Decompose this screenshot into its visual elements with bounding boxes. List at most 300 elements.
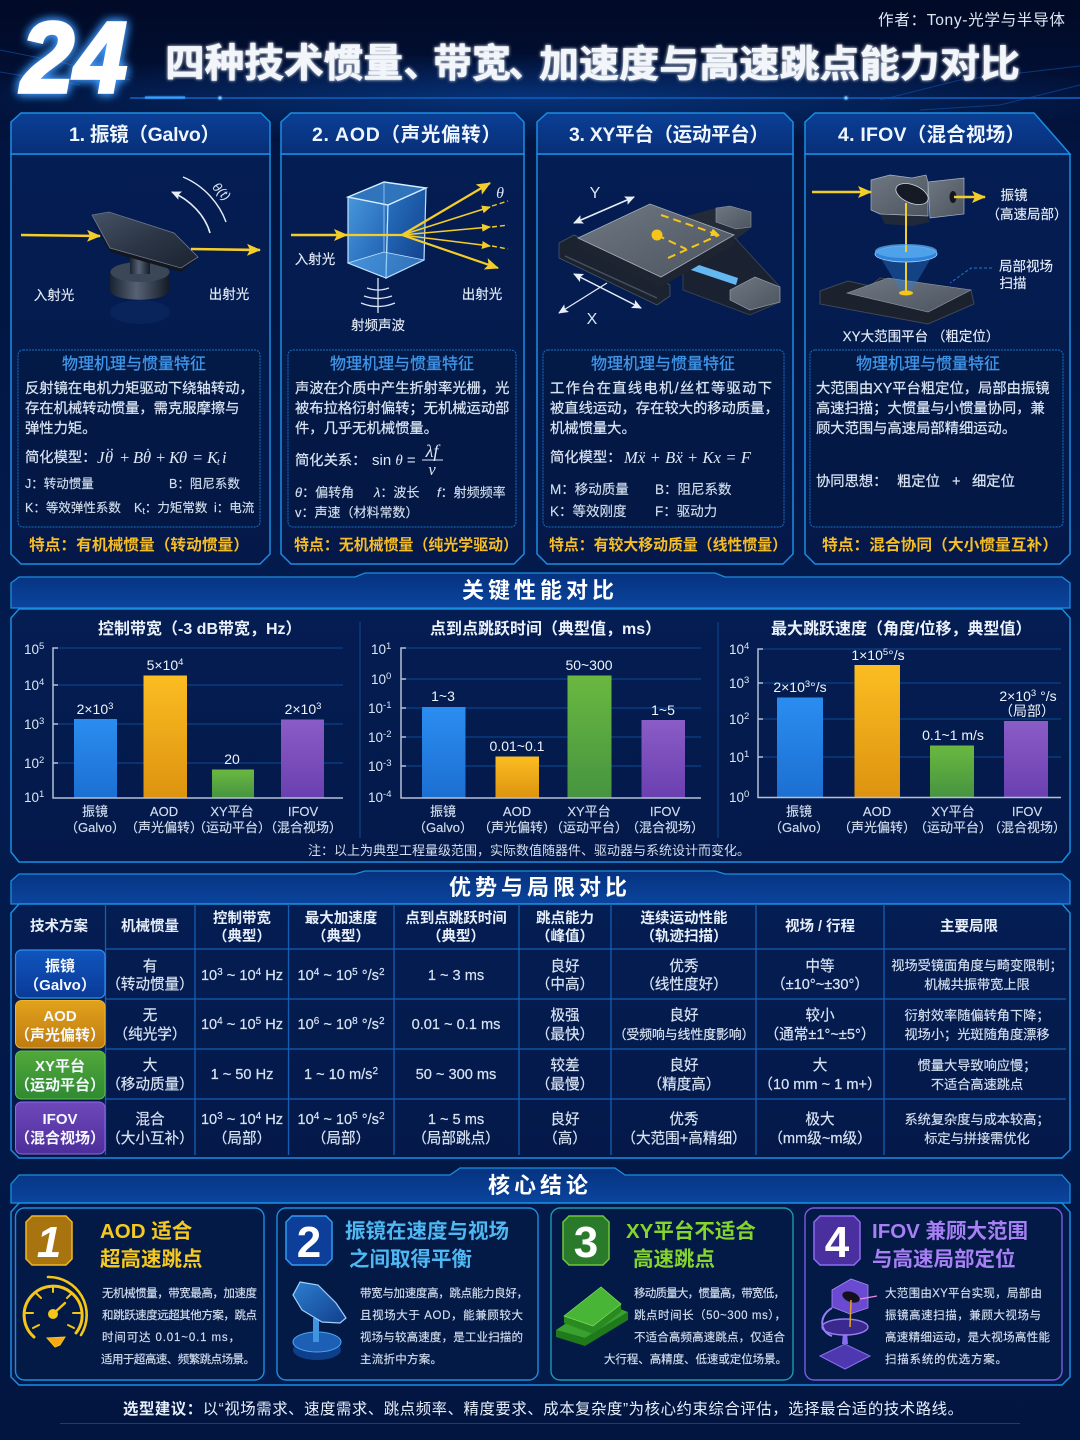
row: galvo: ~ 10 [223, 968, 256, 984]
table header [30, 909, 998, 945]
row: IFOV: 4 [314, 1111, 320, 1122]
box: mechanism: λ：波长 [373, 485, 419, 500]
conclusion 2: 带宽与加速度高，跳点能力良好， [360, 1286, 528, 1300]
chart: bandwidth: 控制带宽（-3 dB带宽，Hz） [98, 619, 302, 638]
heading: 3. XY平台（运动平台） [569, 123, 769, 146]
chart: bandwidth: XY平台 [210, 804, 254, 819]
chart: jump time: 振镜 [430, 804, 456, 819]
formula: K [168, 448, 181, 467]
row: AOD: 0.01 ~ 0.1 ms [412, 1017, 500, 1033]
row: AOD: 较小 [805, 1006, 835, 1024]
chart: jump speed: °/s [810, 679, 827, 695]
box: mechanism: 物理机理与惯量特征 [330, 355, 474, 373]
chart: bandwidth: 2×10 [77, 701, 108, 717]
box: mechanism: 物理机理与惯量特征 [591, 355, 735, 373]
label: scan: 扫描 [1000, 276, 1026, 291]
conclusion 4: 大范围由XY平台实现，局部由 [885, 1286, 1042, 1300]
row: IFOV: 2 [379, 1111, 385, 1122]
row: galvo: （中高） [536, 976, 594, 993]
row: XY: 1 ~ 50 Hz [211, 1067, 273, 1083]
box: mechanism: 物理机理与惯量特征 [62, 355, 206, 373]
row: galvo: 良好 [550, 958, 580, 975]
chart: jump time: 10 [368, 730, 383, 745]
formula: J [97, 448, 105, 467]
chart: bandwidth: 1 [39, 789, 44, 800]
box: mechanism: v [428, 460, 436, 479]
row: IFOV: 系统复杂度与成本较高； [904, 1111, 1050, 1128]
chart: jump time: 1~5 [651, 702, 675, 718]
chart: jump time: 10 [368, 701, 383, 716]
row: galvo: 2 [379, 967, 385, 978]
chart: bandwidth: （运动平台） [193, 820, 271, 835]
row: AOD: （纯光学） [114, 1026, 186, 1043]
row: XY: 良好 [669, 1057, 699, 1074]
badge 2 [286, 1216, 332, 1267]
chart: jump speed: 10 [729, 790, 744, 805]
chart: jump speed: 4 [744, 641, 749, 652]
row: IFOV: （mm级~m级） [768, 1130, 872, 1147]
box: mechanism: Mẍ + Bẍ + Kx = F [623, 448, 752, 467]
formula: + [119, 448, 130, 467]
row: AOD: （声光偏转） [15, 1026, 105, 1044]
row: galvo: （Galvo） [24, 977, 96, 994]
chart: bandwidth: （混合视场） [264, 820, 342, 835]
chart: jump time: 1~3 [431, 688, 455, 704]
chart: bandwidth: 10 [24, 678, 39, 693]
row: IFOV: 标定与拼接需优化 [924, 1130, 1030, 1146]
chart: jump time: （声光偏转） [478, 820, 556, 835]
row: IFOV: 1 ~ 5 ms [428, 1112, 484, 1128]
row: AOD: 6 [314, 1016, 320, 1027]
row: AOD: 5 [256, 1016, 262, 1027]
row: AOD: 良好 [669, 1007, 699, 1024]
table header: （轨迹扫描） [640, 927, 728, 945]
conclusion 2: 主流折中方案。 [360, 1352, 442, 1366]
chart: jump time: XY平台 [567, 804, 611, 819]
conclusion 3: 不适合高频高速跳点，仅适合 [634, 1330, 786, 1344]
icon: AOD crystal: θ [496, 185, 504, 202]
icon: XY stage: Y [590, 185, 601, 202]
row: galvo: 优秀 [669, 958, 699, 975]
chart: jump time: 10 [368, 759, 383, 774]
row: IFOV: 10 [297, 1112, 314, 1128]
conclusion 4: 振镜高速扫描，兼顾大视场与 [885, 1308, 1041, 1322]
chart: jump time: （运动平台） [550, 820, 628, 835]
feature: 特点：有较大移动质量（线性惯量） [549, 535, 787, 554]
chart: jump time: 0 [386, 671, 391, 682]
box: mechanism: 物理机理与惯量特征 [856, 355, 1000, 373]
icon: gauge [24, 1277, 87, 1347]
row: IFOV: 良好 [550, 1111, 580, 1128]
chart: bandwidth: 5×10 [147, 657, 178, 673]
icon: mirror [293, 1282, 346, 1360]
chart: jump speed: °/s [1036, 688, 1057, 704]
title: 加速度与高速跳点能力对比 [539, 43, 1020, 85]
box: mechanism: M：移动质量 [550, 482, 629, 497]
row: IFOV [15, 1102, 1050, 1154]
conclusion 4 [805, 1208, 1062, 1380]
author: 作者：Tony-光学与半导体 [878, 11, 1065, 29]
headline: XY平台不适合 [626, 1219, 756, 1243]
row: galvo: 10 [297, 968, 314, 984]
table header: （峰值） [536, 927, 594, 945]
title: 四种技术惯量 [165, 42, 403, 86]
chart: bandwidth: （Galvo） [65, 820, 125, 835]
chart: jump speed: 1×10 [851, 647, 883, 663]
chart: jump speed: （Galvo） [769, 820, 829, 835]
chart: jump time: -2 [383, 729, 391, 740]
icon: galvo mirror: θ(t) [210, 179, 234, 203]
label: outgoing: 出射光 [209, 287, 249, 302]
table header: 最大加速度 [305, 909, 378, 927]
row: AOD: 极强 [550, 1007, 580, 1024]
icon: IFOV system [812, 175, 992, 324]
row: XY: 大 [143, 1057, 157, 1074]
heading: 优势与局限对比 [449, 875, 631, 900]
heading: 4. IFOV（混合视场） [838, 124, 1025, 146]
row: IFOV: （局部跳点） [412, 1130, 500, 1147]
chart: jump speed: 2×10 [773, 679, 805, 695]
table header: 连续运动性能 [640, 909, 728, 927]
conclusion 2: 且视场大于 AOD，能兼顾较大 [360, 1308, 524, 1322]
table header: （典型） [427, 927, 485, 945]
chart: jump speed: 2 [744, 711, 749, 722]
headline: 振镜在速度与视场 [345, 1219, 509, 1243]
chart: bandwidth: 20 [224, 751, 240, 767]
chart: jump time: （Galvo） [413, 820, 473, 835]
chart: bandwidth: 2×10 [285, 701, 316, 717]
table header: 跳点能力 [536, 909, 594, 927]
chart: jump speed: 3 [1031, 688, 1036, 699]
chart: jump time [368, 619, 704, 835]
chart: jump time: 点到点跳跃时间（典型值，ms） [430, 619, 661, 638]
table header: 视场 / 行程 [785, 918, 856, 935]
badge 4: 4 [825, 1218, 850, 1267]
label: incoming: 入射光 [34, 288, 74, 303]
chart: jump speed [729, 619, 1066, 835]
row: galvo: 5 [352, 967, 358, 978]
conclusion 1 [16, 1208, 264, 1380]
row: IFOV: （局部） [312, 1130, 370, 1147]
box: mechanism: F：驱动力 [655, 504, 717, 519]
row: IFOV: 3 [217, 1111, 223, 1122]
formula: B [133, 448, 143, 467]
box: mechanism: t [142, 506, 145, 516]
label: incoming: 入射光 [295, 252, 335, 267]
conclusion 4: 与高速局部定位 [872, 1247, 1016, 1271]
row: AOD: 10 [201, 1017, 217, 1033]
note: 注：以上为典型工程量级范围，实际数值随器件、驱动器与系统设计而变化。 [308, 843, 750, 858]
chart: jump speed: 3 [805, 679, 810, 690]
panel: AOD [281, 113, 524, 564]
chart: jump speed: 2×10 [999, 688, 1031, 704]
row: IFOV: IFOV [42, 1111, 78, 1128]
badge 3: 3 [574, 1218, 598, 1267]
box: mechanism [288, 350, 516, 527]
table header: 机械惯量 [121, 918, 179, 935]
chart: bandwidth: 3 [108, 701, 113, 712]
chart: jump time: -4 [383, 789, 391, 800]
chart: jump time: 10 [371, 642, 386, 657]
badge 1: 1 [37, 1218, 61, 1267]
chart: bandwidth: 3 [316, 701, 321, 712]
box: mechanism: λf [425, 441, 441, 461]
chart: jump time: -1 [383, 700, 391, 711]
row: IFOV: （混合视场） [15, 1129, 105, 1147]
row: IFOV: ~ 10 [223, 1112, 256, 1128]
chart: jump speed: 0.1~1 m/s [922, 727, 984, 743]
row: XY: 大 [813, 1057, 827, 1074]
conclusion 1: 时间可达 0.01~0.1 ms， [102, 1330, 240, 1344]
chart: jump speed: 3 [744, 675, 749, 686]
row: IFOV: 10 [201, 1112, 217, 1128]
box: mechanism: 被直线运动，存在较大的移动质量， [550, 399, 779, 417]
icon: AOD crystal [291, 182, 508, 313]
row: galvo: 10 [201, 968, 217, 984]
chart: jump speed: 0 [744, 789, 749, 800]
row: AOD: ~ 10 [223, 1017, 256, 1033]
icon: purple system [820, 1279, 877, 1369]
chart: jump speed: °/s [888, 647, 905, 663]
formula: θ [143, 448, 151, 467]
panel: XY [537, 113, 793, 564]
formula [97, 448, 227, 468]
chart: bandwidth: 2 [39, 755, 44, 766]
chart: jump speed: 5 [883, 647, 888, 658]
badge 3 [563, 1216, 609, 1267]
chart: jump time: 10 [368, 790, 383, 805]
row: XY: （10 mm ~ 1 m+） [758, 1076, 882, 1093]
badge 4 [814, 1216, 860, 1267]
box: mechanism: J：转动惯量 [25, 476, 94, 491]
row: AOD: 无 [143, 1008, 157, 1024]
formula: θ [179, 448, 187, 467]
conclusion 1: 超高速跳点 [100, 1247, 202, 1271]
heading: 核心结论 [488, 1173, 592, 1198]
box: mechanism: 简化模型： [550, 449, 621, 466]
label: high speed local: （高速局部） [986, 206, 1068, 222]
icon: galvo mirror [21, 177, 260, 324]
chart: jump time: -3 [383, 758, 391, 769]
conclusion 4: 扫描系统的优选方案。 [885, 1352, 1007, 1366]
row: XY: 2 [372, 1066, 378, 1077]
row: AOD: 衍射效率随偏转角下降； [904, 1007, 1050, 1024]
box: mechanism: f：射频频率 [437, 485, 506, 500]
conclusion 3: 高速跳点 [633, 1247, 715, 1271]
row: galvo: 有 [143, 958, 157, 975]
formula: t [217, 457, 220, 468]
row: AOD: ~ 10 [319, 1017, 352, 1033]
row: AOD [15, 1000, 1050, 1048]
formula: θ [105, 448, 113, 467]
box: mechanism: 弹性力矩。 [25, 420, 96, 437]
chart: bandwidth: 5 [39, 641, 44, 652]
formula: i [222, 448, 227, 467]
chart: bandwidth: 10 [24, 717, 39, 732]
chart: jump speed: （运动平台） [914, 820, 992, 835]
conclusion 3: 移动质量大，惯量高，带宽低， [634, 1286, 785, 1300]
page number: 24 [19, 2, 127, 114]
row: galvo: （线性度好） [640, 976, 728, 993]
conclusion 2: 视场与较高速度，是工业扫描的 [360, 1330, 523, 1344]
chart: bandwidth: IFOV [288, 804, 318, 819]
chart: jump speed: 10 [729, 712, 744, 727]
box: mechanism: 简化关系： [295, 452, 366, 469]
chart: bandwidth: AOD [150, 804, 178, 819]
label: galvo: 振镜 [1000, 188, 1028, 203]
formula: + [155, 448, 166, 467]
conclusion 2: 之间取得平衡 [349, 1247, 472, 1271]
chart: jump time: 50~300 [565, 657, 613, 673]
conclusion 3: 大行程、高精度、低速或定位场景。 [604, 1352, 787, 1366]
chart: jump speed: （局部） [999, 703, 1055, 719]
formula: = [192, 448, 203, 467]
row: XY: （移动质量） [106, 1076, 194, 1093]
recommendation: 选型建议：以“视场需求、速度需求、跳点频率、精度要求、成本复杂度”为核心约束综合评估，选择最合适的技术路线。 [123, 1400, 963, 1418]
chart: jump time: AOD [503, 804, 531, 819]
chart: bandwidth: 振镜 [82, 804, 108, 819]
row: AOD: 视场小；光斑随角度漂移 [904, 1027, 1050, 1043]
conclusion 2 [277, 1208, 538, 1380]
box: mechanism: 细定位 [972, 473, 1015, 490]
section: comparison table [11, 871, 1070, 1158]
table header: （典型） [312, 927, 370, 945]
panel: IFOV [805, 113, 1070, 564]
row: AOD: Hz [261, 1017, 283, 1033]
row: galvo: 视场受镜面角度与畸变限制； [891, 958, 1063, 974]
box: mechanism [810, 350, 1063, 527]
row: AOD: （最快） [536, 1026, 594, 1043]
row: galvo: 中等 [805, 957, 835, 975]
row: galvo: （±10°~±30°） [771, 976, 869, 993]
box: mechanism: 简化模型： [25, 449, 96, 466]
conclusion 1: 适用于超高速、频繁跳点场景。 [101, 1352, 255, 1366]
chart: bandwidth: 3 [39, 716, 44, 727]
row: galvo: 振镜 [45, 957, 75, 975]
conclusion 1: 无机械惯量，带宽最高，加速度 [102, 1286, 258, 1300]
label: XY range: XY大范围平台 （粗定位） [843, 329, 999, 344]
row: XY: 1 ~ 10 m/s [304, 1067, 372, 1083]
row: galvo: 3 [217, 967, 223, 978]
box: mechanism: sin θ = [372, 452, 416, 469]
row: IFOV: Hz [261, 1112, 283, 1128]
section: conclusions [11, 1168, 1070, 1385]
chart: jump speed: 10 [729, 642, 744, 657]
row: IFOV: °/s [358, 1112, 379, 1128]
box: mechanism: K：等效弹性系数 [25, 500, 121, 515]
chart: jump speed: 1 [744, 749, 749, 760]
chart: jump speed: 振镜 [786, 804, 812, 819]
row: IFOV: 5 [352, 1111, 358, 1122]
row: AOD: 4 [217, 1016, 223, 1027]
table header: 技术方案 [30, 917, 88, 935]
row: XY: （运动平台） [15, 1076, 105, 1094]
chart: jump time: 0.01~0.1 [490, 738, 545, 754]
row: AOD: 8 [352, 1016, 358, 1027]
conclusion 3: 跳点时间长（50~300 ms）， [634, 1308, 786, 1322]
row: IFOV: （局部） [213, 1130, 271, 1147]
chart: jump speed: （声光偏转） [838, 820, 916, 835]
chart: jump time: （混合视场） [626, 820, 704, 835]
box: mechanism: v：声速（材料常数） [295, 505, 419, 520]
row: galvo: 1 ~ 3 ms [428, 968, 484, 984]
chart: jump speed: XY平台 [931, 804, 975, 819]
icon: XY stage [559, 185, 780, 328]
row: AOD: AOD [43, 1008, 77, 1025]
feature: 特点：有机械惯量（转动惯量） [29, 535, 249, 554]
row: XY: （精度高） [648, 1076, 720, 1093]
title: 带宽 [433, 43, 511, 86]
row: IFOV: （大小互补） [106, 1130, 194, 1147]
row: AOD: °/s [358, 1017, 379, 1033]
box: mechanism [18, 350, 260, 527]
box: mechanism: 粗定位 [897, 473, 940, 490]
chart: bandwidth: 10 [24, 790, 39, 805]
row: XY: 惯量大导致响应慢； [918, 1057, 1036, 1074]
chart: jump speed: 最大跳跃速度（角度/位移，典型值） [771, 619, 1031, 638]
chart: jump speed: AOD [863, 804, 891, 819]
chart: jump speed: 10 [729, 750, 744, 765]
row: XY: 不适合高速跳点 [931, 1076, 1023, 1092]
box: mechanism: θ：偏转角 [295, 485, 354, 500]
row: AOD: （受频响与线性度影响） [614, 1027, 754, 1042]
feature: 特点：混合协同（大小惯量互补） [822, 535, 1058, 554]
row: AOD: 2 [379, 1016, 385, 1027]
row: galvo: ~ 10 [319, 968, 352, 984]
table header: 控制带宽 [213, 909, 271, 927]
box: mechanism [543, 350, 784, 527]
conclusion 1: 和跳跃速度远超其他方案，跳点 [102, 1308, 257, 1322]
chart: bandwidth: 4 [39, 677, 44, 688]
chart: jump speed: 10 [729, 676, 744, 691]
chart: jump time: 10 [371, 672, 386, 687]
row: galvo [16, 950, 1063, 998]
chart: bandwidth: 10 [24, 642, 39, 657]
box: mechanism: K：等效刚度 [550, 503, 627, 519]
box: mechanism: i：电流 [214, 501, 255, 515]
box: mechanism: 高速扫描；大惯量与小惯量协同，兼 [816, 400, 1045, 417]
table header: （典型） [213, 927, 271, 945]
title: 、 [508, 43, 547, 86]
row: IFOV: （高） [543, 1130, 587, 1147]
box: mechanism: + [952, 474, 960, 490]
row: XY: XY平台 [35, 1057, 85, 1075]
box: mechanism: 大范围由XY平台粗定位，局部由振镜 [816, 380, 1050, 397]
box: mechanism: 机械惯量大。 [550, 420, 636, 437]
chart: jump time: IFOV [650, 804, 680, 819]
feature: 特点：无机械惯量（纯光学驱动） [294, 535, 518, 554]
row: IFOV: 优秀 [669, 1111, 699, 1128]
heading: 关键性能对比 [462, 578, 618, 603]
chart: bandwidth [24, 619, 343, 835]
title: 、 [403, 43, 442, 86]
heading: 1. 振镜（Galvo） [69, 123, 220, 146]
box: mechanism: K [134, 501, 142, 515]
row: XY: 50 ~ 300 ms [416, 1067, 496, 1083]
conclusion 3 [551, 1208, 793, 1380]
row: IFOV: 4 [256, 1111, 262, 1122]
box: mechanism: 存在机械转动惯量，需克服摩擦与 [25, 399, 239, 417]
box: mechanism: 反射镜在电机力矩驱动下绕轴转动， [25, 380, 254, 397]
label: local field: 局部视场 [999, 259, 1053, 274]
row: galvo: °/s [358, 968, 379, 984]
headline: IFOV 兼顾大范围 [872, 1220, 1028, 1243]
row: XY [15, 1051, 1036, 1099]
row: AOD: 10 [297, 1017, 314, 1033]
row: galvo: 4 [256, 967, 262, 978]
title [165, 42, 1020, 86]
section: performance [11, 573, 1070, 862]
